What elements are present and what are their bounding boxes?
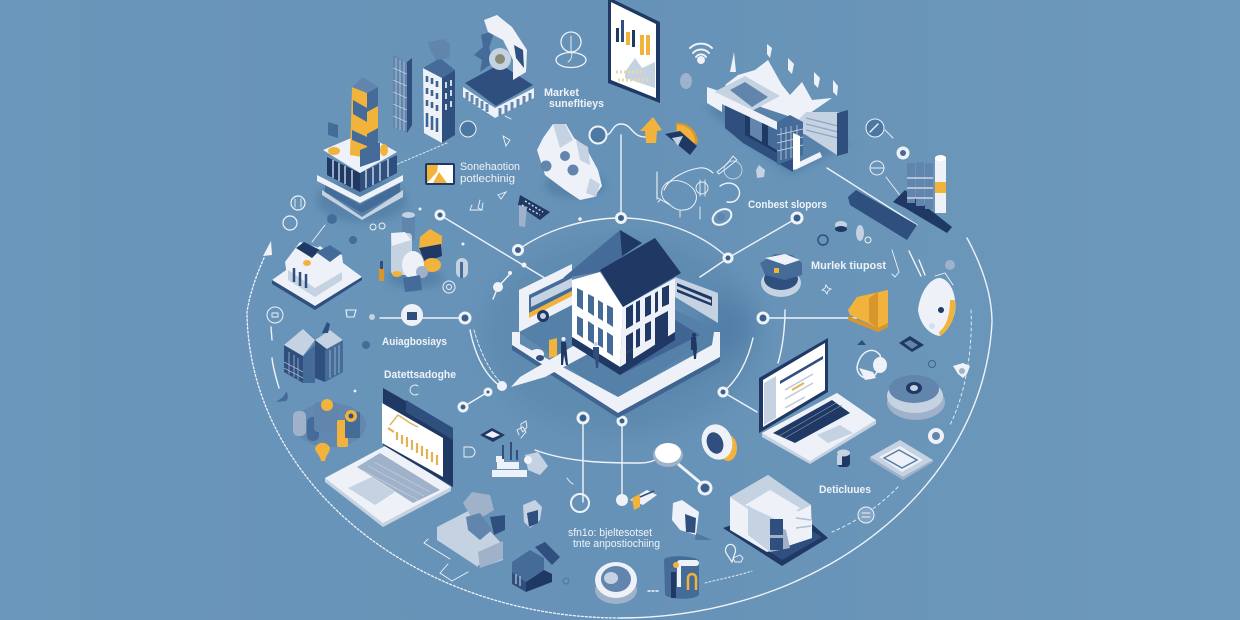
orbit rings <box>247 238 992 618</box>
icon: person outline <box>556 32 586 68</box>
icon: office tower <box>423 39 455 143</box>
right facade <box>620 278 675 367</box>
icon: glass data house <box>723 475 828 566</box>
small icon cluster upper left <box>283 121 510 293</box>
icon: white dish <box>918 273 955 336</box>
icon: stacked boxes <box>424 492 505 581</box>
icon: coin and cylinder stack <box>293 399 366 461</box>
right windows <box>626 285 669 366</box>
back walls <box>519 264 718 332</box>
icon: cylinder platform <box>760 254 802 297</box>
platform floor <box>518 280 718 402</box>
icon: yellow logo tile <box>425 163 455 185</box>
small home <box>672 500 712 540</box>
label: Auiagbosiays: Auiagbosiays <box>382 336 447 348</box>
icon: small cylinder <box>837 450 850 467</box>
icon: small glyphs bottom <box>563 478 743 584</box>
icon: lens <box>595 562 637 604</box>
icon: factory complex <box>705 44 850 175</box>
icon: round device <box>887 375 945 420</box>
icon: data and helmet stack <box>379 212 443 292</box>
label: Conbest slopors: Conbest slopors <box>748 199 827 211</box>
icon: dark tag <box>518 195 550 227</box>
network connectors <box>312 124 917 502</box>
label: Sonehaotion: Sonehaotion <box>460 161 520 173</box>
entry ramp <box>511 345 588 387</box>
platform rim <box>512 332 720 413</box>
icon: isometric plaza <box>272 242 362 310</box>
icon: arrow with yellow dish <box>640 117 698 155</box>
glow under house <box>482 235 762 435</box>
network nodes <box>401 126 802 512</box>
icon: left laptop <box>325 388 453 527</box>
icon: line art sketch <box>657 156 765 228</box>
icon: coin <box>680 73 692 89</box>
icon: twin cube buildings <box>284 322 343 383</box>
icon: hexagon cluster <box>537 124 605 200</box>
icon: right laptop <box>759 338 876 464</box>
left facade <box>572 272 623 367</box>
icon: magnet and misc right <box>857 323 970 380</box>
icon: tray document <box>870 440 933 480</box>
label: Murlek tiupost: Murlek tiupost <box>811 260 886 272</box>
icon: ring with yellow <box>697 420 737 464</box>
label: potlechinig: potlechinig <box>460 173 515 185</box>
label: Datettsadoghe: Datettsadoghe <box>384 369 456 381</box>
icon: small device <box>523 500 542 528</box>
icon: chimney plant <box>848 155 952 240</box>
label: sfn1o bjeltesotset: sfn1o: bjeltesotset <box>568 527 652 539</box>
front roof <box>600 238 681 307</box>
icon: yellow tower building <box>317 77 407 222</box>
icon: stone blocks <box>492 442 548 477</box>
small icons upper right <box>818 119 955 294</box>
icon: magnifier <box>653 443 702 484</box>
icon: sketch note <box>470 116 511 210</box>
icon: tag <box>480 427 526 442</box>
label: Deticluues: Deticluues <box>819 484 871 496</box>
icon: blue figure kiosk <box>648 556 699 599</box>
central house <box>511 230 720 418</box>
icon: yellow blocks <box>848 290 888 332</box>
label: tnte anpostiochiing: tnte anpostiochiing <box>573 538 660 550</box>
building shadow <box>572 320 700 375</box>
icon: card near lower nodes <box>630 490 657 510</box>
label: sunefltieys: sunefltieys <box>549 98 604 110</box>
base <box>572 332 675 375</box>
left windows <box>577 288 613 356</box>
small icons left rail <box>267 307 527 457</box>
icon: slim tower <box>393 55 412 133</box>
icon: wifi <box>690 44 712 64</box>
icon: gear on plinth <box>463 15 534 118</box>
label: Market: Market <box>544 87 579 99</box>
icon: analytics tablet <box>608 0 660 103</box>
people and props <box>530 333 697 368</box>
icon: chair pieces <box>512 542 560 592</box>
back roof <box>563 230 642 278</box>
icon: small badges right <box>858 428 944 523</box>
